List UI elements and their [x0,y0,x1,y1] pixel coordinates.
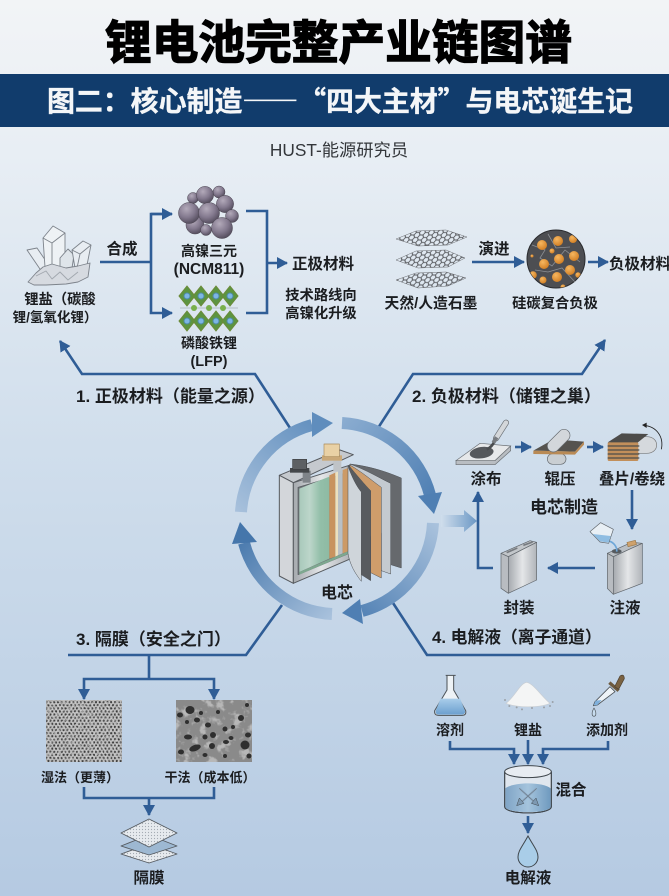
subtitle band [0,74,669,127]
label: lithium salt: 锂盐（碳酸 [24,290,96,308]
label: cell: 电芯 [321,584,353,602]
arrow: mixing to electrolyte [527,816,529,833]
cycle ring arrows [232,412,442,624]
icon: battery cell cutaway [279,444,401,583]
label: stacking and winding: 叠片/卷绕 [599,469,665,488]
icon: lithium salt crystal [27,226,91,285]
arrow: sealing back to coating [478,492,493,568]
note: technology roadmap [285,286,357,322]
cell layers [299,468,348,575]
label: LFP: (LFP) [190,354,228,370]
heading: electrolyte: 4. 电解液（离子通道） [432,627,602,647]
label: wet process: 湿法（更薄） [41,770,119,785]
arrow: cell to manufacturing flow [441,510,477,532]
icon: additive dropper [592,675,624,716]
label: LFP [181,335,237,370]
label: NCM811 [174,243,244,278]
icon: LFP crystal lattice [179,286,238,331]
label: mixing: 混合 [555,780,587,799]
arrow: cathode bracket [246,211,287,313]
icon: rolling [533,435,584,459]
label: LFP: 磷酸铁锂 [181,335,237,351]
label: graphite: 天然/人造石墨 [385,294,478,312]
arrow: to anode material [588,261,608,263]
heading: separator: 3. 隔膜（安全之门） [76,629,231,649]
icon: separator layers [121,819,177,863]
cell casing [279,450,353,583]
arrow: coating to rolling [515,446,531,448]
icon: mixing vessel [505,766,551,813]
icon: electrolyte drop [518,836,538,867]
icon: solvent flask [435,675,466,715]
heading: anode: 2. 负极材料（储锂之巢） [412,386,601,406]
label: rolling: 辊压 [544,470,576,488]
arrow: evolution [472,261,524,263]
cell terminals [290,444,342,483]
heading: cathode: 1. 正极材料（能量之源） [76,386,265,406]
arrow: ingredients merge [450,740,608,764]
subtitle: 图二：核心制造——“四大主材”与电芯诞生记 [47,80,633,120]
label: evolution: 演进 [478,239,510,258]
icon: silicon-carbon composite [527,230,585,290]
label: lithium salt: 锂盐 [514,722,542,738]
label: additive: 添加剂 [586,722,628,738]
note: technology roadmap: 技术路线向 [285,286,357,304]
connector: electrolyte branch line [393,603,610,655]
arrow: synthesis fork [100,214,172,313]
cell electrode pages [348,464,401,581]
label: silicon carbon anode: 硅碳复合负极 [512,294,598,312]
panel: separator [41,655,256,887]
icon: coating [456,423,511,465]
author credit: HUST-能源研究员 [270,140,408,160]
label: cathode material: 正极材料 [292,254,354,273]
connector: cathode branch line [60,341,290,428]
note: technology roadmap: 高镍化升级 [285,304,357,322]
label: lithium salt [13,290,97,325]
label: dry process: 干法（成本低） [164,770,256,785]
label: NCM811: 高镍三元 [181,243,237,259]
panel: anode materials [385,230,669,312]
icon: sealed cell [501,541,537,593]
icon: lithium salt powder [504,682,554,710]
panel: cell manufacturing [441,423,665,617]
label: injection: 注液 [609,598,641,617]
icon: electrolyte injection [590,523,642,594]
arrow: stacking to injection [631,490,633,529]
image: dry process membrane [176,700,252,762]
arrow: rolling to stacking [587,446,603,448]
label: separator: 隔膜 [133,869,165,887]
label: sealing: 封装 [503,599,535,617]
label: lithium salt: 锂/氢氧化锂） [13,309,97,325]
heading: cell manufacturing: 电芯制造 [530,498,598,517]
arrow: injection to sealing [548,567,595,569]
connector: separator branch line [68,605,282,655]
label: coating: 涂布 [470,469,502,488]
title: 锂电池完整产业链图谱 [105,17,572,69]
arrow: separator fork [84,655,214,699]
panel: electrolyte [435,675,628,887]
icon: stacking and winding [608,423,662,461]
label: electrolyte: 电解液 [505,869,552,887]
icon: graphite layers [396,230,467,288]
connector: anode branch line [378,340,605,428]
label: synthesis: 合成 [106,239,138,258]
icon: NCM811 particles [178,186,238,238]
panel: cathode materials [13,186,357,370]
image: wet process membrane [46,700,122,762]
arrow: separator merge [84,787,214,815]
label: NCM811: (NCM811) [174,261,244,278]
label: solvent: 溶剂 [436,722,464,738]
